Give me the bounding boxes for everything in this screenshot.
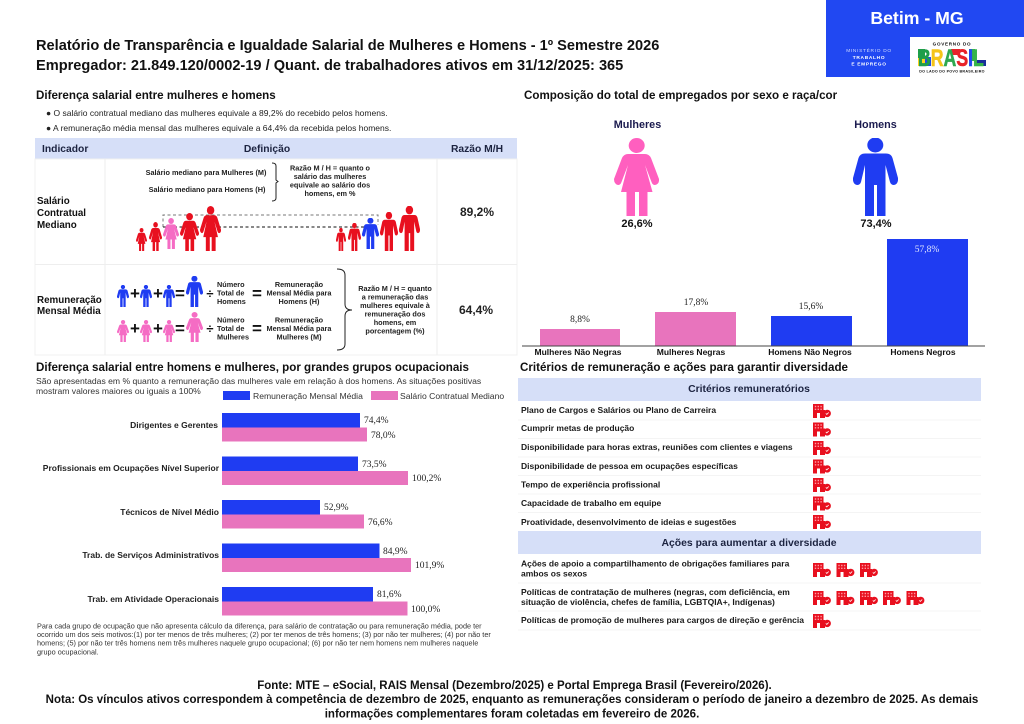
panel: indicator table: Definição <box>244 144 290 155</box>
row: Remuneração Mensal Média: Mulheres (M) <box>276 332 322 342</box>
chart legend <box>223 391 504 401</box>
header badge: Betim - MG: DO LADO DO POVO BRASILEIRO <box>919 70 985 74</box>
panel: salary gap summary: ● O salário contratual mediano das mulheres equivale a 89,2% do recebido pelos homens. <box>46 108 388 118</box>
footnote: Para cada grupo de ocupação que não apresenta cálculo da diferença, para salário de contratação ou para remuneração média, pode ter <box>37 622 482 630</box>
logo: Brasil wordmark: BRASIL <box>918 46 984 72</box>
icons: men average equation: ÷ <box>206 286 214 301</box>
icons: women average equation: + <box>130 319 140 338</box>
list: remuneration criteria: Tempo de experiência profissional <box>521 480 660 490</box>
row: Salário Contratual Mediano: Salário <box>37 196 70 207</box>
footnote: ocorrido um dos seis motivos:(1) por ter menos de três mulheres; (2) por ter menos de três homens; (3) por não ter mulheres; (4) por não ter <box>37 630 491 639</box>
icon: woman 26,6% <box>614 119 661 230</box>
bar chart: occupational groups: 73,5% <box>362 460 387 470</box>
row: Remuneração Mensal Média: Remuneração <box>275 280 324 289</box>
row: Salário Contratual Mediano: Salário mediano para Homens (H) <box>149 185 266 194</box>
header badge: Betim - MG: Betim - MG <box>870 8 964 28</box>
bar chart: race and sex: 15,6% <box>799 302 823 312</box>
icon: man 73,4%: 73,4% <box>860 218 892 230</box>
row: Salário Contratual Mediano: 89,2% <box>460 205 494 219</box>
icons: men average equation: + <box>153 284 163 303</box>
chart legend: Remuneração Mensal Média <box>253 391 363 401</box>
row: Salário Contratual Mediano: homens, em % <box>304 189 356 198</box>
panel: occupational groups: São apresentadas em % quanto a remuneração das mulheres vale em relação à dos homens. As situações positivas <box>36 376 481 386</box>
bar chart: occupational groups: 76,6% <box>368 518 393 528</box>
header badge: Betim - MG: GOVERNO DO <box>933 42 971 46</box>
row: Salário Contratual Mediano: Salário mediano para Mulheres (M) <box>146 168 267 177</box>
footnote: grupo ocupacional. <box>37 648 99 656</box>
bar chart: race and sex <box>522 239 985 357</box>
row: Remuneração Mensal Média: mulheres equivale à <box>360 301 431 310</box>
bar chart: occupational groups <box>43 413 444 616</box>
panel: salary gap summary <box>36 89 391 133</box>
icons: men average equation: + <box>130 284 140 303</box>
row: Remuneração Mensal Média: Remuneração <box>37 295 102 306</box>
bar chart: occupational groups: 81,6% <box>377 590 402 600</box>
row: Remuneração Mensal Média: Remuneração <box>275 316 324 324</box>
footer note: informações complementares foram coletadas em fevereiro de 2026. <box>325 708 699 720</box>
list: diversity actions: Políticas de contratação de mulheres (negras, com deficiência, em <box>521 587 790 597</box>
list: remuneration criteria <box>521 405 793 527</box>
row: Remuneração Mensal Média: Mulheres <box>217 332 249 342</box>
icons: criteria buildings <box>813 404 831 529</box>
row: Remuneração Mensal Média: Total de <box>217 324 244 333</box>
row: Remuneração Mensal Média: porcentagem (%) <box>365 326 425 336</box>
bar chart: race and sex: Mulheres Não Negras <box>535 347 622 357</box>
list: diversity actions: Ações de apoio a compartilhamento de obrigações familiares para <box>521 558 790 568</box>
list: diversity actions: situação de violência, chefes de família, LGBTQIA+, Indígenas) <box>521 597 775 607</box>
panel: criteria and actions: Ações para aumentar a diversidade <box>662 538 837 549</box>
bar chart: occupational groups: Profissionais em Ocupações Nível Superior <box>43 463 220 473</box>
bar chart: occupational groups: 100,0% <box>411 605 440 615</box>
panel: occupational groups: mostram valores maiores ou iguais a 100% <box>36 386 201 396</box>
footer note: Fonte: MTE – eSocial, RAIS Mensal (Dezembro/2025) e Portal Emprega Brasil (Fevereiro/2026). <box>257 680 772 692</box>
header badge: Betim - MG: TRABALHO <box>853 55 885 61</box>
chart legend: Salário Contratual Mediano <box>400 391 504 401</box>
row: Salário Contratual Mediano: salário das mulheres <box>294 172 366 181</box>
icon: man 73,4% <box>853 119 898 230</box>
bar chart: race and sex: 8,8% <box>570 315 590 325</box>
row: Salário Contratual Mediano <box>37 163 494 251</box>
panel: indicator table: Indicador <box>42 144 88 155</box>
footnote <box>37 622 491 656</box>
bar chart: race and sex: Mulheres Negras <box>657 347 726 357</box>
bar chart: race and sex: Homens Não Negros <box>768 347 852 357</box>
panel: composition by sex and race: Composição do total de empregados por sexo e raça/cor <box>524 89 838 102</box>
list: remuneration criteria: Disponibilidade para horas extras, reuniões com clientes e viagens <box>521 442 793 452</box>
icon: woman 26,6%: 26,6% <box>621 218 653 230</box>
header badge: Betim - MG: E EMPREGO <box>851 62 887 68</box>
title <box>36 38 659 74</box>
row: Salário Contratual Mediano: Mediano <box>37 220 77 231</box>
footer note: Nota: Os vínculos ativos correspondem à competência de dezembro de 2025, enquanto as remunerações consideram o período de janeiro a dezembro de 2025. As demais <box>46 694 978 706</box>
row: Remuneração Mensal Média: Mensal Média <box>37 306 101 317</box>
bar chart: occupational groups: 84,9% <box>383 547 408 557</box>
panel: occupational groups: Diferença salarial entre homens e mulheres, por grandes grupos ocupacionais <box>36 361 469 374</box>
footnote: homens; (5) por não ter três homens nem três mulheres naquele grupo ocupacional; (6) por não ter nem homens nem mulheres naquele <box>37 638 478 648</box>
row: Remuneração Mensal Média: Razão M / H = quanto <box>358 284 432 293</box>
panel: occupational groups <box>36 361 504 656</box>
bar chart: occupational groups: 74,4% <box>364 416 389 426</box>
bar chart: occupational groups: Trab. de Serviços Administrativos <box>82 550 219 560</box>
title: Relatório de Transparência e Igualdade Salarial de Mulheres e Homens - 1º Semestre 2026 <box>36 38 659 54</box>
row: Salário Contratual Mediano: Contratual <box>37 208 86 219</box>
icons: actions buildings <box>813 563 924 628</box>
bar chart: race and sex: 57,8% <box>915 245 939 255</box>
header badge: Betim - MG: MINISTÉRIO DO <box>846 47 892 54</box>
footer note <box>46 680 978 720</box>
bar chart: race and sex: Homens Negros <box>890 347 956 357</box>
icons: women average equation <box>117 312 262 342</box>
bar chart: occupational groups: Trab. em Atividade Operacionais <box>88 594 219 604</box>
row: Remuneração Mensal Média: Número <box>217 316 245 324</box>
row: Remuneração Mensal Média: Mensal Média para <box>267 324 332 333</box>
panel: criteria and actions <box>518 361 981 630</box>
bar chart: occupational groups: 52,9% <box>324 503 349 513</box>
panel: composition by sex and race <box>522 89 985 357</box>
list: diversity actions <box>521 558 804 625</box>
icons: women average equation: = <box>252 319 262 338</box>
row: Remuneração Mensal Média: Total de <box>217 288 244 298</box>
list: remuneration criteria: Disponibilidade de pessoa em ocupações específicas <box>521 461 738 471</box>
row: Remuneração Mensal Média: Número <box>217 280 245 289</box>
panel: indicator table: Razão M/H <box>451 144 503 155</box>
row: Remuneração Mensal Média: Mensal Média para <box>267 288 332 298</box>
icons: men salary line-up <box>336 206 420 251</box>
list: remuneration criteria: Cumprir metas de produção <box>521 423 634 433</box>
icon: woman 26,6%: Mulheres <box>614 119 661 131</box>
icons: men average equation: = <box>252 284 262 303</box>
row: Remuneração Mensal Média <box>37 269 493 350</box>
bar chart: occupational groups: Dirigentes e Gerentes <box>130 420 218 430</box>
panel: criteria and actions: Critérios remuneratórios <box>688 384 810 395</box>
row: Salário Contratual Mediano: equivale ao salário dos <box>290 180 370 190</box>
bar chart: race and sex: 17,8% <box>684 298 708 308</box>
list: remuneration criteria: Capacidade de trabalho em equipe <box>521 498 662 508</box>
icons: women average equation: ÷ <box>206 321 214 336</box>
bar chart: occupational groups: 78,0% <box>371 431 396 441</box>
row: Remuneração Mensal Média: 64,4% <box>459 303 493 317</box>
icons: women salary line-up <box>136 206 221 251</box>
panel: salary gap summary: Diferença salarial entre mulheres e homens <box>36 89 276 102</box>
icon: man 73,4%: Homens <box>854 119 897 131</box>
bar chart: occupational groups: 101,9% <box>415 561 444 571</box>
header badge: Betim - MG <box>826 0 1024 77</box>
row: Salário Contratual Mediano: Razão M / H = quanto o <box>290 164 371 172</box>
panel: criteria and actions: Critérios de remuneração e ações para garantir diversidade <box>520 361 849 374</box>
icons: women average equation: = <box>175 319 185 338</box>
panel: salary gap summary: ● A remuneração média mensal das mulheres equivale a 64,4% da recebida pelos homens. <box>46 123 391 133</box>
panel: indicator table <box>35 138 517 355</box>
icons: men average equation <box>117 276 262 307</box>
list: remuneration criteria: Proatividade, desenvolvimento de ideias e sugestões <box>521 517 737 527</box>
row: Remuneração Mensal Média: Homens (H) <box>279 297 320 306</box>
title: Empregador: 21.849.120/0002-19 / Quant. de trabalhadores ativos em 31/12/2025: 365 <box>36 58 623 74</box>
row: Remuneração Mensal Média: Homens <box>217 297 246 306</box>
list: remuneration criteria: Plano de Cargos e Salários ou Plano de Carreira <box>521 405 716 415</box>
list: diversity actions: ambos os sexos <box>521 568 587 578</box>
row: Remuneração Mensal Média: remuneração dos <box>365 310 425 318</box>
bar chart: occupational groups: 100,2% <box>412 474 441 484</box>
row: Remuneração Mensal Média: a remuneração das <box>362 292 428 302</box>
row: Remuneração Mensal Média: homens, em <box>374 318 417 327</box>
icons: men average equation: = <box>175 284 185 303</box>
bar chart: occupational groups: Técnicos de Nível Médio <box>120 507 219 517</box>
icons: women average equation: + <box>153 319 163 338</box>
list: diversity actions: Políticas de promoção de mulheres para cargos de direção e gerência <box>521 615 804 625</box>
